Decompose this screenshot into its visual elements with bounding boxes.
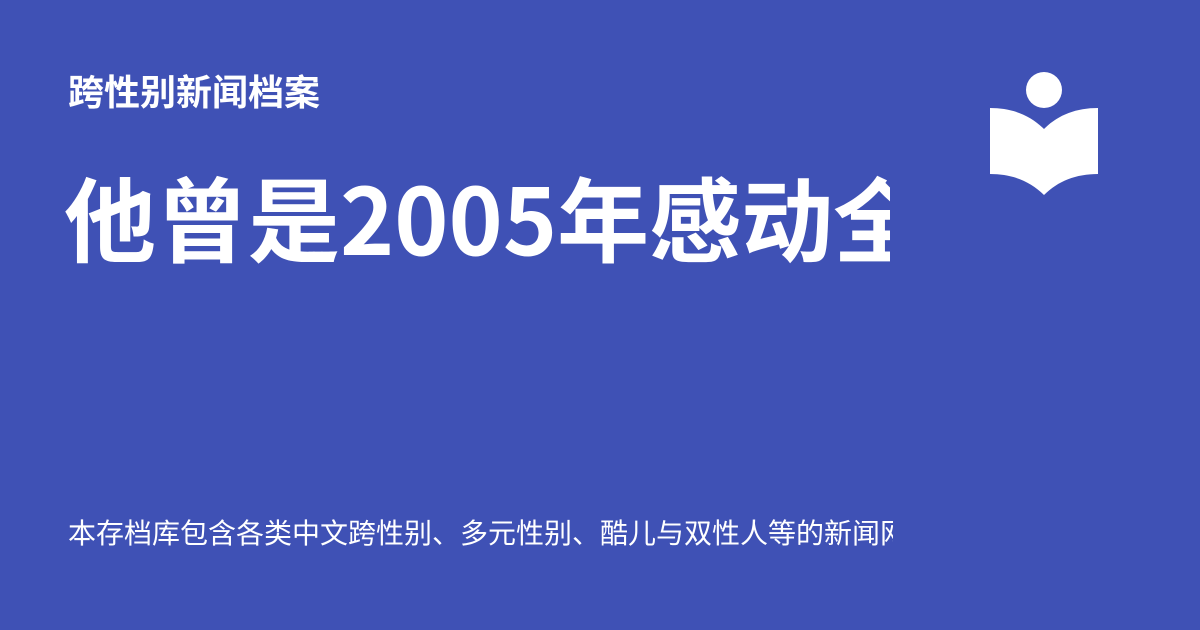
icon: reader with open book (990, 72, 1098, 195)
site name heading: 跨性别新闻档案 (68, 64, 320, 116)
